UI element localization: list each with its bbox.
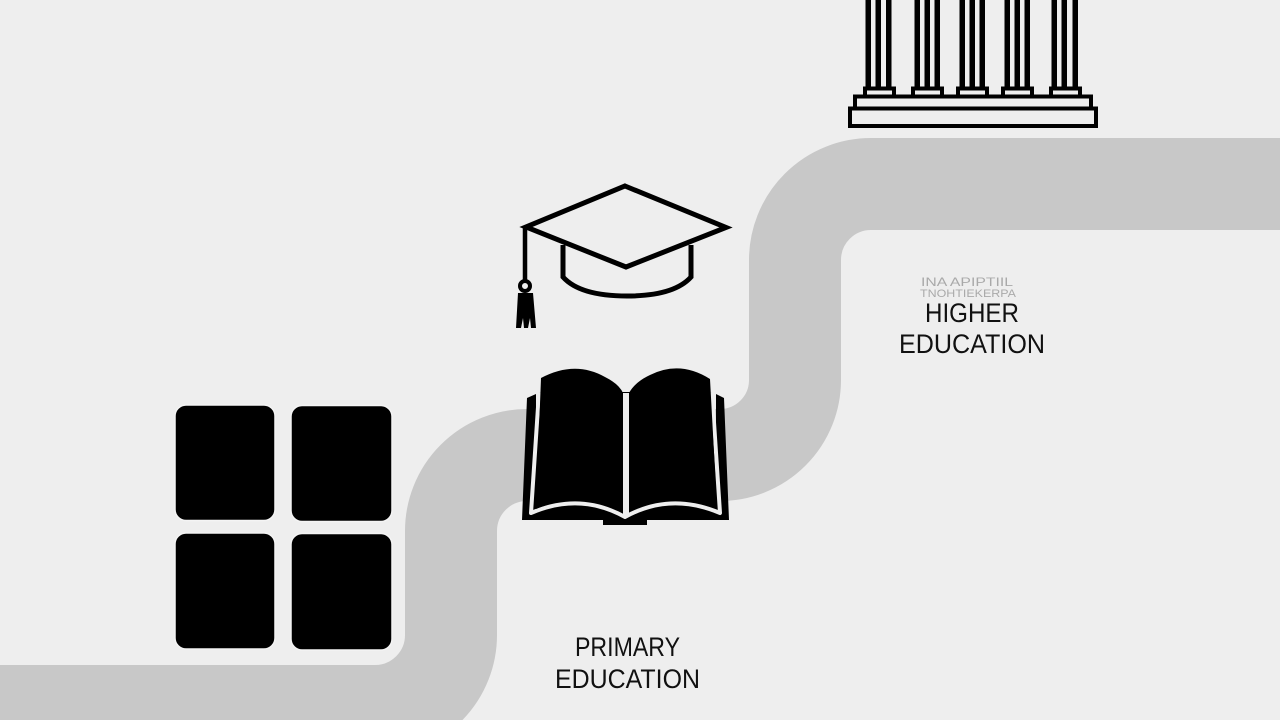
garbled small caption: TNOHTIEKERPA [920,288,1017,300]
garbled small caption: INA APIPTIIL [921,275,1013,289]
garbled small caption [920,275,1017,300]
winding path band [0,184,1280,711]
label: primary education [555,632,700,694]
label: higher education: HIGHER [925,298,1019,328]
icon: open book [522,368,729,525]
label: primary education: PRIMARY [575,632,680,662]
icon: four window panes [175,405,392,650]
label: primary education: EDUCATION [555,664,700,694]
icon: graduation cap [516,186,726,328]
icon: classical columns [850,0,1096,126]
label: higher education [899,298,1045,359]
label: higher education: EDUCATION [899,329,1045,359]
